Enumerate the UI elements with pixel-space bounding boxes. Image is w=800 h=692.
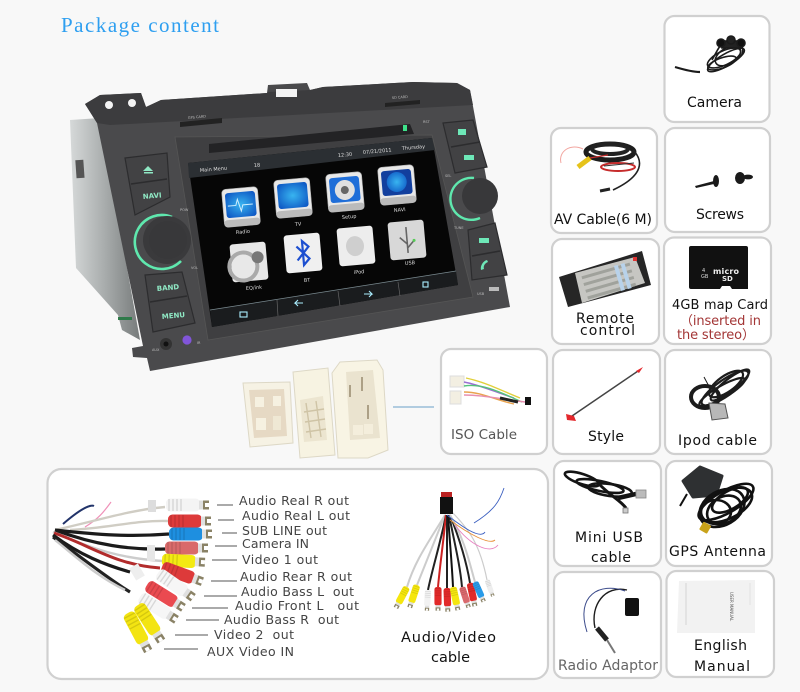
head unit stereo: NAVI [394,207,406,214]
panel: map card: the stereo） [677,328,755,343]
icon: AV cable harness [393,488,504,612]
screen icon: NAVI [377,165,417,205]
panel: manual: English [694,638,747,654]
head unit stereo: Radio [236,229,250,236]
icon: AV cable [561,144,640,191]
aux and IR: IR [197,341,201,345]
panel: camera [664,16,770,122]
aux and IR [152,335,201,352]
head unit stereo: VOL [191,266,198,270]
head unit stereo: Setup [342,214,357,221]
screen bezel [175,135,473,340]
head unit stereo: USB [477,292,485,296]
panel: mini USB [554,461,661,566]
port labels: Audio Rear R out [240,569,352,584]
port labels: Video 2 out [214,627,294,642]
head unit stereo [70,82,510,371]
panel: map card [664,238,771,344]
metal side chassis [70,118,140,340]
screen [188,138,458,327]
panel: mini USB: Mini USB [575,530,643,546]
panel: screws: Screws [696,207,744,223]
right buttons [443,120,487,173]
icon: ISO cable [450,376,531,405]
screen icon: Radio [221,187,261,227]
panel: remote control [552,239,659,344]
panel: remote control: Remote [576,311,634,327]
panel: ISO cable [441,349,547,454]
icon: micro SD card: micro [713,267,740,276]
head unit stereo: Thursday [401,144,425,152]
panel: AV cable [551,128,657,233]
icon: micro SD card [689,246,748,289]
head unit stereo: POW [180,208,189,212]
panel: audio video cable [48,469,548,679]
port labels: AUX Video IN [207,644,294,659]
head unit stereo: TV [294,221,302,228]
panel: camera: Camera [687,95,742,111]
port labels [207,493,359,659]
panel: iPod cable: Ipod cable [678,433,757,449]
panel: map card: 4GB map Card [672,298,768,313]
screen icon: TV [273,178,313,218]
screen icon: iPod [336,226,376,266]
panel: GPS antenna [666,461,772,566]
head unit stereo: MENU [161,311,186,321]
head unit stereo: 07/21/2011 [363,148,392,156]
aux and IR: AUX [152,348,160,352]
panel: manual: Manual [694,659,750,675]
port labels: Audio Real R out [239,493,349,508]
head unit stereo: NAVI [142,191,162,201]
panel: AV cable: AV Cable(6 M) [554,212,652,228]
panel: remote control: control [580,323,635,339]
wiring connectors photo [243,360,388,458]
head unit stereo: SD CARD [392,95,408,100]
unit body [85,82,510,371]
head unit stereo: SEL [445,174,451,178]
head unit stereo: iPod [354,269,365,276]
port labels: Video 1 out [242,552,318,567]
icon: micro SD card: GB [701,274,709,280]
icon: screws [695,172,753,188]
caption [401,630,496,666]
icon: iPod cable [691,365,753,420]
harness wires [53,502,169,592]
connector leader line [393,406,434,408]
panel: mini USB: cable [591,550,631,566]
left knob [135,215,191,269]
disc slot [209,124,414,153]
screen icon: Setup [325,172,365,212]
icon: manual: USER MANUAL [729,592,734,622]
port labels: Audio Real L out [242,508,350,523]
port labels: Audio Bass L out [241,584,354,599]
panel: iPod cable [665,350,771,454]
caption: cable [431,650,470,666]
panel: ISO cable: ISO Cable [451,427,517,443]
left buttons [125,153,170,215]
panel: map card: （inserted in [680,314,761,329]
port labels: SUB LINE out [242,523,327,538]
panel: radio adaptor: Radio Adaptor [558,658,658,674]
icon: camera coil [675,36,747,76]
head unit stereo: MIC [182,144,189,148]
icon: remote [559,251,651,307]
panel: stylus [553,350,660,454]
icon: mini USB [563,469,646,513]
port labels: Audio Front L out [235,598,359,613]
RCA plugs [122,498,212,654]
panel: stylus: Style [588,429,624,445]
screen icon: USB [387,220,427,260]
panel: screws [665,128,770,232]
screen icon: BT [283,233,323,273]
icon: micro SD card: SD [722,275,733,283]
icon: stylus [566,367,643,421]
screen icon: EQ [227,242,269,283]
head unit stereo: USB [405,260,416,267]
head unit stereo: BT [304,277,312,284]
right knob [450,178,498,220]
head unit stereo: GPS CARD [188,114,206,120]
screen bottom bar [210,271,458,327]
head unit stereo: EQ/ink [246,285,262,292]
head unit stereo: 12:30 [338,152,353,159]
leader lines [164,505,237,649]
icon: micro SD card: 4 [702,268,705,274]
icon: GPS antenna [680,467,758,535]
panel: manual [666,571,774,677]
port labels: Audio Bass R out [224,612,339,627]
title: Package content [61,13,219,37]
head unit stereo: BAND [156,283,180,293]
head unit stereo: Main Menu [200,166,227,174]
head unit stereo: 18 [254,162,261,169]
head unit stereo: TUNE [453,226,464,230]
caption: Audio/Video [401,630,496,646]
head unit stereo: RST [423,120,431,124]
icon: radio adaptor [584,588,639,653]
port labels: Camera IN [242,536,309,551]
panel: radio adaptor [554,572,661,678]
panel: GPS antenna: GPS Antenna [669,544,766,560]
